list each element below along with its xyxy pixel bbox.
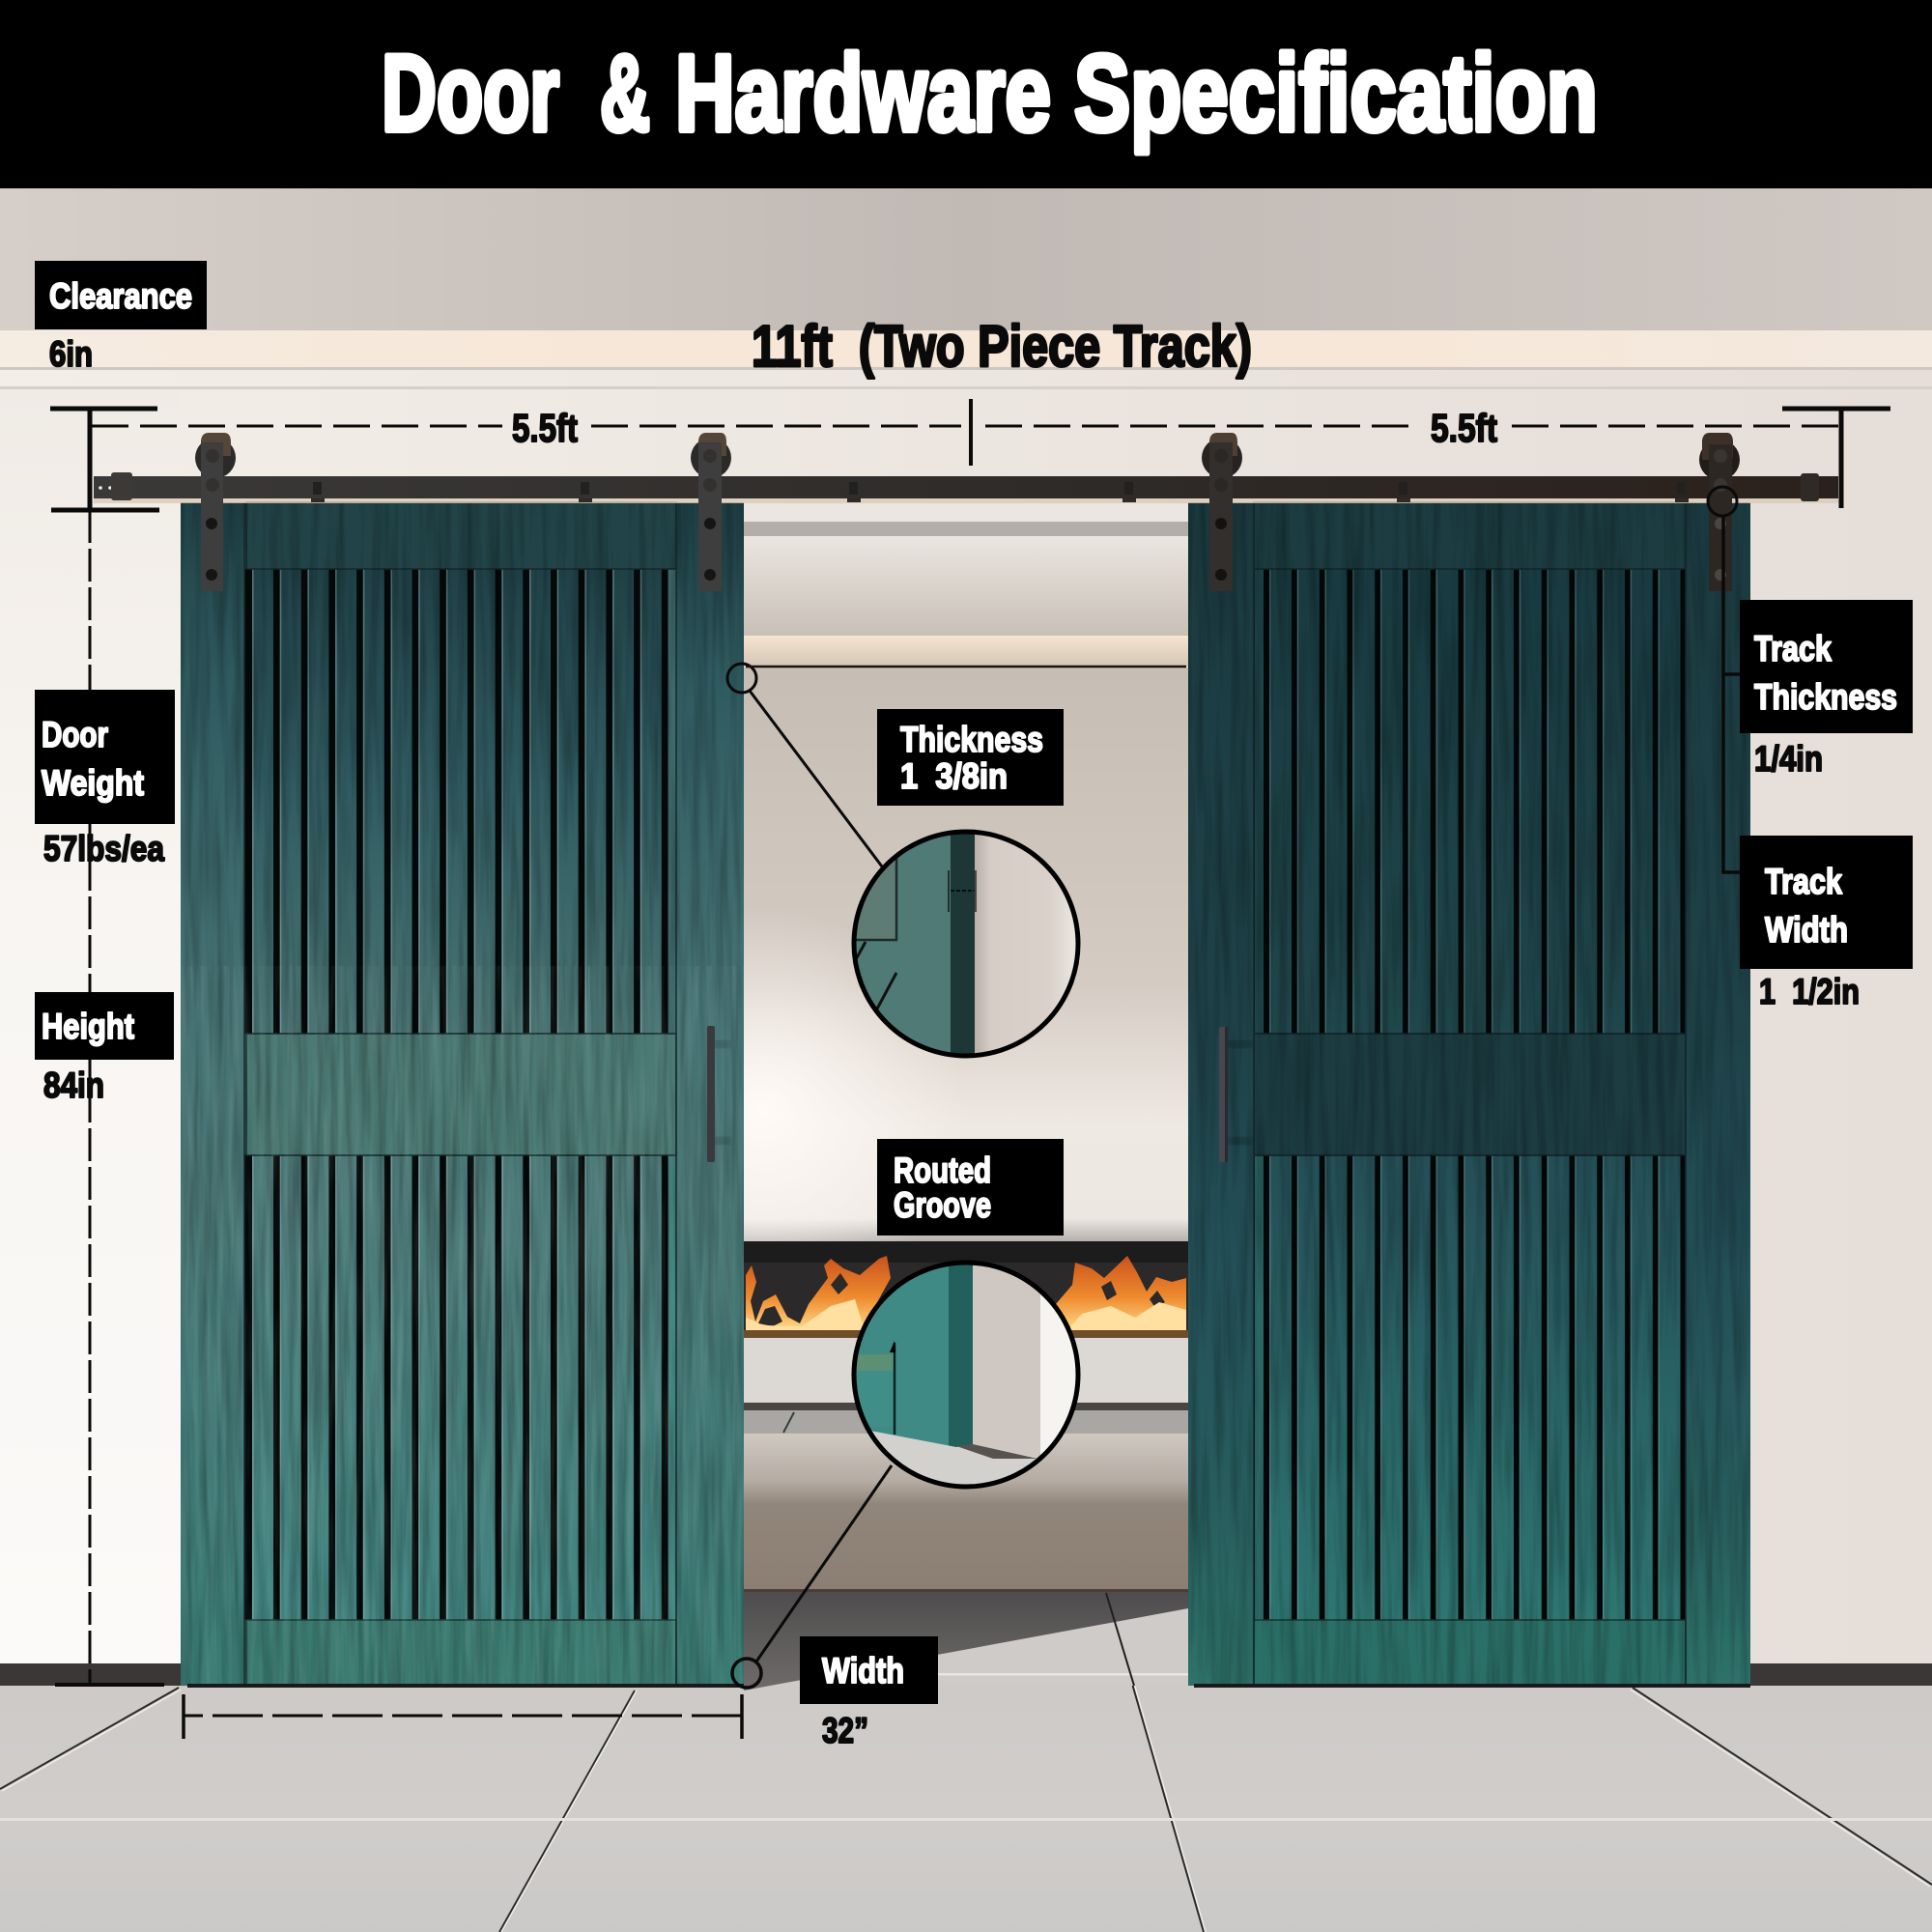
- left door top rail: [246, 502, 676, 569]
- heading: track length: 11ft (Two Piece Track): [752, 314, 1252, 379]
- leader line: thickness callout: [727, 664, 1186, 867]
- door width dashed dimension line: [184, 1694, 742, 1739]
- hanger 3: [1202, 433, 1242, 591]
- leader line: routed groove callout: [732, 1465, 892, 1688]
- callout: door weight: 57lbs/ea: [43, 829, 164, 868]
- callout: track thickness: Track: [1754, 629, 1832, 668]
- right door bottom rail: [1254, 1620, 1686, 1686]
- clearance dimension bracket and door height dashed line: [50, 409, 164, 1686]
- callout: track thickness: [1740, 600, 1913, 779]
- callout: track thickness: Thickness: [1754, 677, 1897, 717]
- left door middle rail: [246, 1034, 676, 1155]
- left door handle: [707, 1026, 730, 1162]
- title banner: Door: [382, 33, 559, 154]
- callout: door thickness: [877, 709, 1064, 806]
- right door top rail: [1254, 502, 1686, 569]
- callout: door weight: Door: [42, 715, 108, 754]
- right door handle: [1219, 1027, 1252, 1162]
- title banner: [0, 0, 1932, 188]
- callout: track width: Track: [1765, 862, 1842, 901]
- hanger 1: [195, 433, 236, 591]
- fireplace flames right: [1056, 1256, 1186, 1330]
- callout: door thickness: 1 3/8in: [900, 756, 1008, 796]
- callout: routed groove: [877, 1139, 1064, 1236]
- callout: door width: [800, 1636, 938, 1750]
- barn door track rail: [94, 472, 1838, 503]
- callout: clearance: 6in: [49, 334, 93, 374]
- callout: height: 84in: [43, 1065, 104, 1105]
- right door upper slat panel: [1254, 569, 1686, 1034]
- right door: [1188, 502, 1750, 1686]
- callout: door weight: Weight: [42, 763, 144, 803]
- right door lower slat panel: [1254, 1154, 1686, 1620]
- callout: clearance: Clearance: [49, 276, 192, 316]
- label: left track half: 5.5ft: [512, 406, 578, 450]
- detail circle: door thickness: [850, 826, 1082, 1058]
- callout: routed groove: Groove: [894, 1185, 991, 1225]
- track length dashed dimension line: [92, 399, 1890, 508]
- callout: door width: Width: [822, 1651, 904, 1690]
- callout: track width: 1 1/2in: [1759, 972, 1860, 1011]
- fireplace flames left: [746, 1256, 891, 1330]
- callout: height: [35, 992, 174, 1105]
- title banner: Specification: [1074, 33, 1598, 154]
- title banner: &: [600, 33, 650, 154]
- callout: door width: 32”: [822, 1711, 868, 1750]
- door floor shadow: [187, 1684, 1750, 1688]
- left door lower slat panel: [244, 1154, 676, 1620]
- left door: [181, 502, 744, 1686]
- callout: routed groove: Routed: [894, 1151, 991, 1190]
- callout: track thickness: 1/4in: [1754, 739, 1823, 779]
- detail circle: routed groove: [850, 1256, 1082, 1507]
- leader lines: track thickness and width: [1708, 487, 1740, 872]
- title banner: Hardware: [675, 33, 1051, 154]
- callout: track width: [1740, 836, 1913, 1011]
- callout: height: Height: [42, 1007, 134, 1046]
- hanger 4: [1699, 433, 1740, 591]
- left door upper slat panel: [244, 569, 676, 1034]
- right door middle rail: [1254, 1034, 1686, 1155]
- callout: door weight: [35, 690, 175, 868]
- opening between doors with interior room: [744, 498, 1188, 1690]
- callout: door thickness: Thickness: [900, 720, 1043, 759]
- callout: clearance: [35, 261, 207, 374]
- left door bottom rail: [246, 1620, 676, 1686]
- label: right track half: 5.5ft: [1431, 406, 1497, 450]
- callout: track width: Width: [1765, 910, 1848, 950]
- hanger 2: [691, 433, 731, 591]
